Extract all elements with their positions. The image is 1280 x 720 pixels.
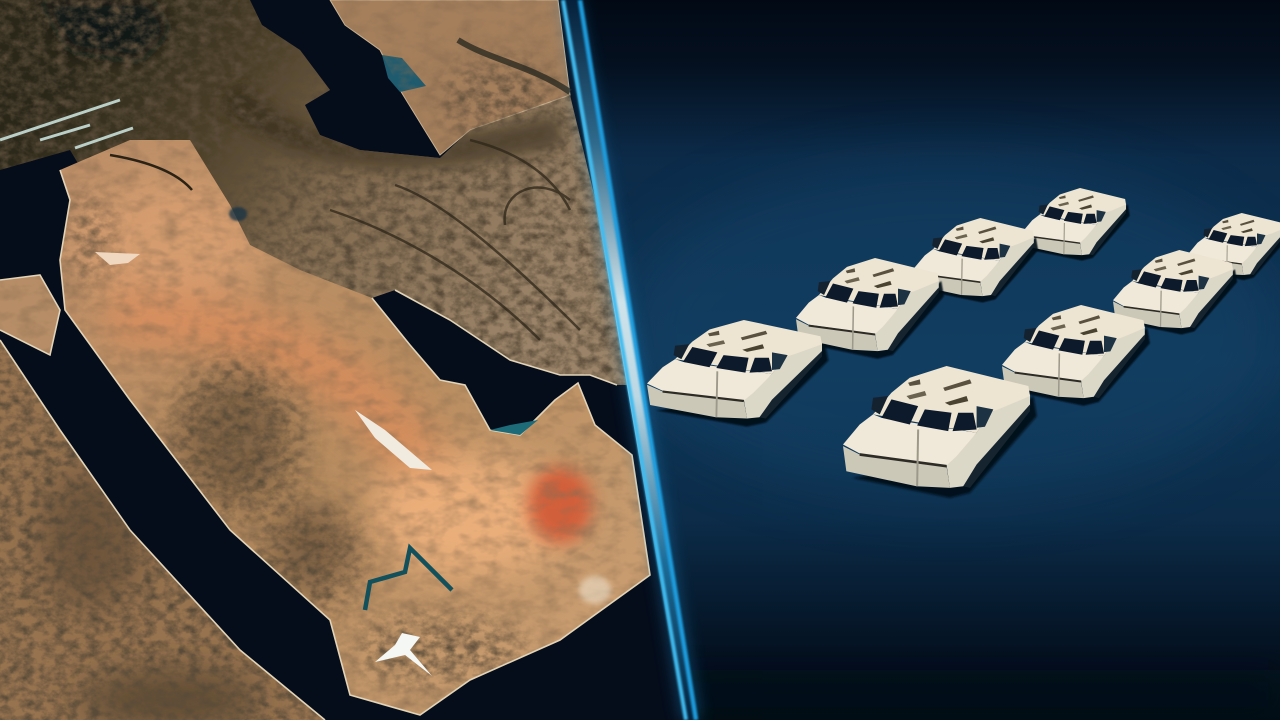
landmass: Central Asia bbox=[330, 0, 570, 155]
swirl folds in Iran bbox=[330, 140, 580, 340]
beam right edge bbox=[580, 0, 696, 720]
river mark bbox=[458, 40, 570, 92]
northern desert glow bbox=[75, 180, 265, 310]
strong highland texture bbox=[61, 44, 570, 702]
sand patch: Oman bbox=[579, 576, 611, 604]
gulf teal shallows bbox=[490, 420, 538, 435]
lake: Aral Sea bbox=[382, 55, 426, 92]
dark crack near Syria bbox=[110, 155, 192, 190]
landmass: Africa bbox=[0, 340, 325, 720]
landmass: Arabian Peninsula bbox=[60, 140, 650, 715]
energy beam divider bbox=[561, 0, 697, 720]
vehicle: second row centre bbox=[914, 218, 1038, 303]
African dark terrain bbox=[40, 470, 140, 610]
orange sand band bbox=[110, 319, 440, 500]
panel: dark blue vehicle field bbox=[596, 67, 1280, 662]
beam glow bbox=[570, 0, 691, 720]
strong terrain grain bbox=[0, 0, 700, 720]
vehicle: third row right bbox=[1002, 305, 1150, 406]
vehicle: second row right bbox=[1113, 250, 1237, 335]
sea inlet: Black Sea bbox=[40, 0, 170, 60]
southern sand glow bbox=[370, 455, 570, 575]
vehicle: third row left bbox=[796, 258, 944, 359]
sea background bbox=[0, 0, 700, 720]
terrain texture bbox=[0, 0, 626, 720]
dark ridge along Caspian bbox=[230, 95, 560, 153]
teal wadi line bbox=[365, 548, 452, 610]
landmass: Turkey and Iran bbox=[0, 0, 640, 385]
beam left edge bbox=[563, 0, 686, 720]
dark highland bbox=[180, 375, 290, 505]
terrain shading and heat colours bbox=[0, 0, 700, 720]
African lower shading bbox=[80, 670, 260, 720]
vehicle: rear centre bbox=[1023, 188, 1130, 261]
sand streak: northern bbox=[95, 252, 140, 265]
beam core bbox=[561, 0, 697, 720]
red hot spot bbox=[528, 467, 592, 543]
panel: satellite map of the Middle East bbox=[0, 0, 700, 720]
light terrain texture bbox=[0, 0, 700, 720]
white streaks at top left bbox=[0, 100, 133, 148]
landmass: Sinai bbox=[0, 275, 60, 355]
vehicle: front bbox=[843, 366, 1037, 498]
white star mark bbox=[375, 633, 432, 676]
coastlines bbox=[0, 170, 650, 720]
vehicle: rear right bbox=[1189, 213, 1280, 280]
bottom darkening bbox=[680, 670, 1280, 720]
dark highland south bbox=[270, 505, 350, 595]
lake near Iraq bbox=[229, 207, 247, 221]
sand streak: gulf coast bbox=[355, 410, 432, 470]
floor glow bbox=[647, 165, 1254, 494]
vehicle: far left bbox=[647, 320, 828, 427]
vehicle formation bbox=[647, 188, 1280, 498]
